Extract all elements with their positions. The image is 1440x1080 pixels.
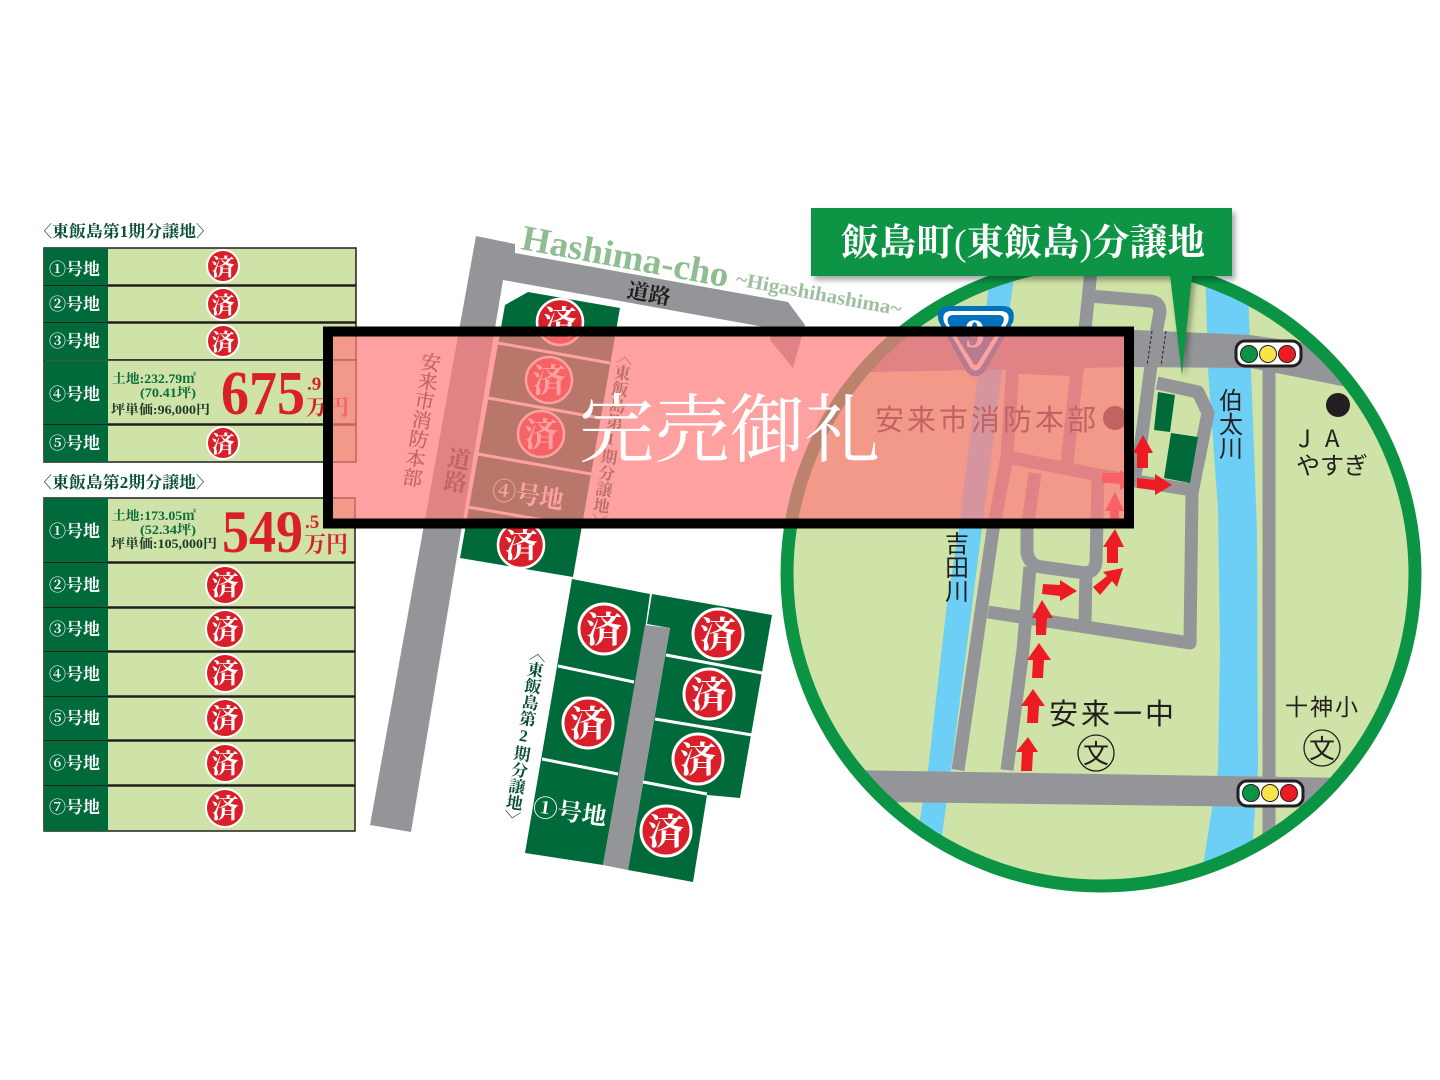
site title: Hashima-cho: Hashima-cho — [519, 218, 732, 295]
badge: sold 2-3 — [206, 610, 244, 648]
road network — [958, 270, 1269, 850]
road: lower main — [845, 770, 1350, 808]
heading: phase 2: 〈東飯島第2期分譲地〉 — [35, 472, 213, 492]
badge: sold 2-4 — [206, 654, 244, 692]
callout: site name: 飯島町(東飯島)分譲地 — [841, 222, 1205, 264]
price: 549.5万円: 549 — [222, 499, 303, 565]
table: phase 1 lots: ⑤号地 — [49, 434, 100, 453]
table: phase 1 lots: ①号地 — [49, 260, 100, 279]
price: 675.9万円: 675 — [221, 360, 305, 428]
badge: plan 2 lot E — [673, 734, 723, 784]
lot 4 details: (70.41坪) — [140, 385, 196, 400]
badge: plan 2 lot F: 済 — [648, 812, 684, 852]
icon: school 1: 文 — [1083, 734, 1109, 771]
badge: plan 2 lot E: 済 — [680, 740, 716, 780]
table: phase 2 lots: ④号地 — [49, 665, 100, 684]
table: phase 1 lots: ②号地 — [49, 295, 100, 314]
lot 1 details: 坪単価:105,000円 — [111, 536, 217, 551]
lot label: ④号地 — [490, 476, 566, 515]
badge: plan lot 5: 済 — [544, 305, 576, 342]
table: phase 2 lots — [44, 498, 355, 831]
badge: sold 1-1 — [207, 250, 239, 282]
overlay: sold-out banner — [328, 332, 1129, 524]
label: Yoshida river: 吉田川 — [940, 531, 974, 603]
badge: plan 2 lot B — [563, 698, 613, 748]
badge: sold 1-1: 済 — [212, 255, 234, 280]
price: 675.9万円: 万円 — [306, 395, 349, 420]
label: elementary school: 十神小 — [1285, 688, 1360, 722]
badge: plan 2 lot A — [579, 604, 629, 654]
lot label: ①号地 — [531, 794, 608, 831]
phase 1 lot plan — [460, 290, 620, 577]
badge: sold 1-3: 済 — [212, 330, 234, 355]
badge: plan lot 4 — [526, 357, 572, 403]
river: Yoshida — [920, 281, 1014, 836]
label: JA Yasugi: やすぎ — [1296, 446, 1368, 481]
label: JA Yasugi — [1296, 393, 1368, 481]
vertical label: road: 道路 — [439, 445, 472, 495]
price: 675.9万円: .9 — [307, 374, 321, 395]
lot 1 details: 土地:173.05㎡ — [112, 508, 196, 523]
table: phase 2 lots: ⑥号地 — [49, 754, 100, 773]
badge: sold 1-3 — [207, 325, 239, 357]
icon: route 9 sign: 9 — [965, 311, 985, 356]
heading: phase 1: 〈東飯島第1期分譲地〉 — [35, 221, 213, 241]
badge: plan 2 lot D: 済 — [691, 675, 727, 715]
price: 549.5万円: .5 — [305, 512, 319, 533]
badge: sold 2-4: 済 — [212, 659, 238, 689]
badge: plan lot 5 — [537, 299, 583, 345]
callout: site name — [811, 208, 1232, 375]
site title: Hashima-cho — [519, 218, 904, 321]
lot 1 details — [111, 508, 217, 551]
area map — [785, 260, 1417, 888]
label: Hakuta river: 伯太川 — [1214, 388, 1248, 460]
badge: sold 2-5: 済 — [212, 704, 238, 734]
badge: plan 2 lot D — [684, 669, 734, 719]
table: phase 1 lots: ③号地 — [49, 332, 100, 351]
label: fire department: 安来市消防本部 — [875, 397, 1099, 439]
badge: plan 2 lot C — [693, 609, 743, 659]
badge: plan 2 lot A: 済 — [586, 610, 622, 650]
icon: traffic light bottom — [1238, 781, 1303, 806]
badge: sold 2-7 — [206, 789, 244, 827]
icon: route 9 sign — [938, 306, 1014, 376]
road: site access road — [370, 236, 805, 832]
badge: sold 2-6: 済 — [212, 749, 238, 779]
road: upper main — [870, 330, 1360, 387]
subdivision lots — [1154, 392, 1198, 483]
badge: sold 2-7: 済 — [212, 794, 238, 824]
badge: plan 2 lot C: 済 — [700, 615, 736, 655]
label: JA Yasugi: JA — [1298, 419, 1353, 454]
badge: sold 2-3: 済 — [212, 615, 238, 645]
badge: sold 2-2: 済 — [212, 571, 238, 601]
badge: plan lot 4: 済 — [532, 363, 566, 400]
badge: sold 2-5 — [206, 699, 244, 737]
lot 4 details: 土地:232.79㎡ — [112, 371, 196, 386]
badge: sold 2-2 — [206, 566, 244, 604]
road label: 道路 — [625, 278, 673, 310]
vertical label: phase 2: 〈東飯島第2期分譲地〉 — [500, 644, 548, 828]
badge: plan lot 1: 済 — [504, 528, 538, 565]
lot 1 details: (52.34坪) — [140, 522, 196, 537]
route arrows — [1016, 435, 1172, 771]
site title: Hashima-cho: ~Higashihashima~ — [734, 268, 904, 321]
icon: traffic light top — [1236, 341, 1301, 366]
label: junior high: 安来一中 — [1049, 691, 1177, 733]
table: phase 2 lots: ⑤号地 — [49, 709, 100, 728]
railway crossing marks — [1147, 331, 1166, 366]
table: phase 2 lots: ③号地 — [49, 620, 100, 639]
table: phase 2 lots: ②号地 — [49, 576, 100, 595]
map ring — [787, 262, 1415, 886]
price: 549.5万円: 万円 — [304, 532, 348, 557]
river: Hakuta — [1204, 286, 1258, 862]
badge: plan lot 3 — [518, 411, 564, 457]
badge: plan lot 3: 済 — [524, 417, 558, 454]
table: phase 2 lots: ⑦号地 — [49, 798, 100, 817]
lot 4 details — [111, 371, 210, 417]
icon: school 2: 文 — [1309, 729, 1335, 766]
badge: sold 1-5: 済 — [212, 432, 234, 457]
badge: sold 1-2 — [207, 288, 239, 320]
vertical label: phase 1: 〈東飯島第1期分譲地〉 — [587, 347, 635, 531]
badge: sold 1-5 — [207, 427, 239, 459]
badge: sold 1-2: 済 — [212, 293, 234, 318]
table: phase 1 lots — [44, 248, 356, 462]
lot 4 details: 坪単価:96,000円 — [111, 402, 210, 417]
table: phase 1 lots: ④号地 — [49, 385, 100, 404]
vertical label: fire department: 安来市消防本部 — [398, 350, 442, 489]
table: phase 2 lots: ①号地 — [49, 522, 100, 541]
badge: sold 2-6 — [206, 744, 244, 782]
overlay: sold-out banner: 完売御礼 — [579, 371, 880, 478]
badge: plan lot 1 — [498, 522, 544, 568]
badge: plan 2 lot B: 済 — [570, 704, 606, 744]
phase 2 lot plan — [525, 579, 772, 882]
badge: plan 2 lot F — [641, 806, 691, 856]
